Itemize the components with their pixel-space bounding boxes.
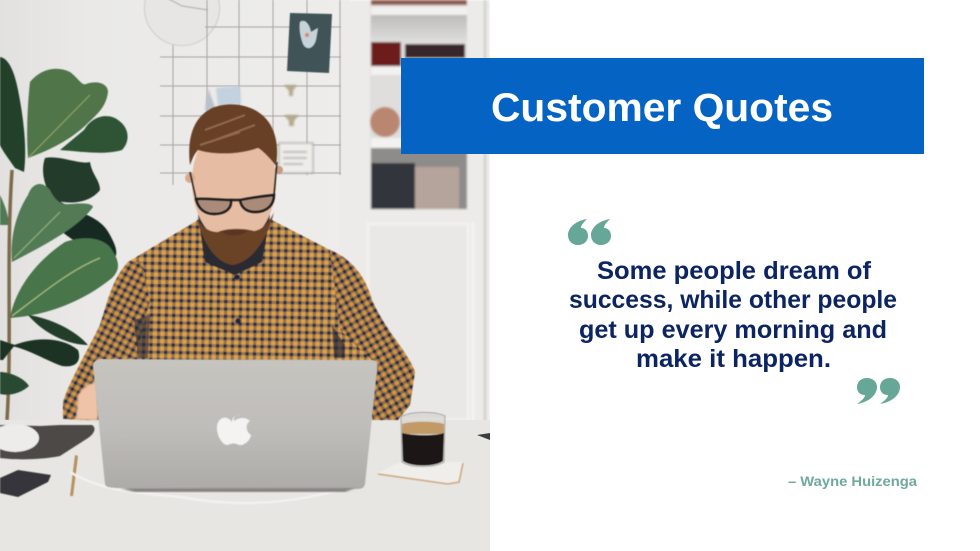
attribution: – Wayne Huizenga (788, 473, 917, 489)
quote text: get up every morning and (579, 316, 887, 344)
coffee glass (401, 412, 445, 466)
laptop cable (70, 472, 362, 503)
icon: opening quotation mark (568, 219, 611, 245)
photo: man working at a laptop (0, 0, 490, 551)
quote text (569, 257, 897, 373)
pinned poster (287, 13, 332, 73)
glasses (190, 162, 277, 214)
wall clock (144, 0, 220, 46)
wall background (0, 0, 350, 425)
white cabinet (340, 0, 490, 425)
fiddle-leaf plant (0, 57, 128, 420)
quote text: make it happen. (636, 345, 831, 373)
item at table edge (477, 433, 490, 440)
laptop (93, 359, 377, 492)
pinned notes (205, 85, 313, 173)
quote text: Some people dream of (597, 257, 872, 285)
pencil (70, 455, 78, 496)
apple logo (217, 414, 251, 445)
shirt (63, 218, 415, 420)
hand (76, 382, 98, 420)
head and face (185, 104, 283, 275)
wire grid board (160, 0, 341, 185)
title: Customer Quotes (491, 86, 833, 130)
mouse pad and mouse (0, 424, 95, 459)
icon: closing quotation mark (857, 378, 900, 404)
coaster (378, 462, 463, 484)
title banner (401, 58, 924, 154)
quote text: success, while other people (569, 286, 897, 314)
smartphone (0, 470, 51, 497)
table surface (0, 420, 490, 551)
